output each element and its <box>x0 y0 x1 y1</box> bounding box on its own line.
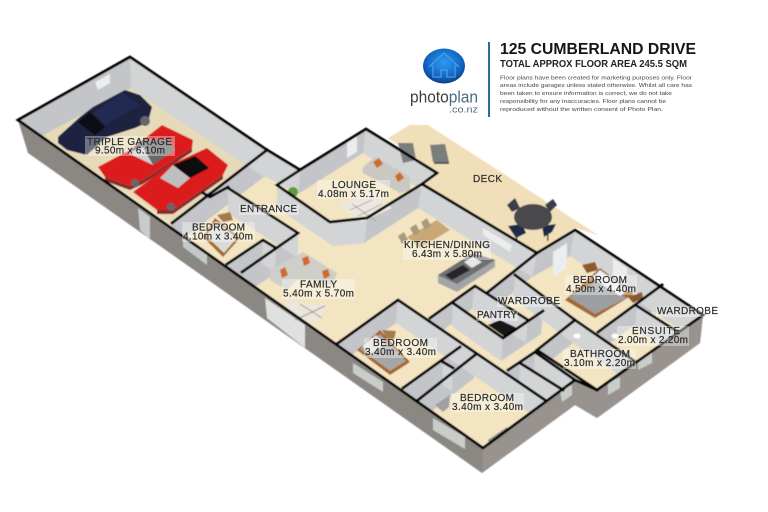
label: bedroom one: 4.10m x 3.40m <box>183 232 253 242</box>
label: entrance: ENTRANCE <box>240 204 297 215</box>
label: lounge: 4.08m x 5.17m <box>318 189 389 200</box>
label: kitchen dining: KITCHEN/DINING <box>404 240 490 251</box>
disclaimer text <box>500 76 692 113</box>
label: lounge: LOUNGE <box>332 180 376 191</box>
disclaimer text: responsibility for any inaccuracies. Floor plans cannot be <box>500 99 666 105</box>
label: corner bedroom: BEDROOM <box>460 393 514 404</box>
label: bedroom one: BEDROOM <box>192 222 245 234</box>
label: wardrobe centre: WARDROBE <box>498 296 560 307</box>
label: wardrobe right: WARDROBE <box>657 306 718 317</box>
logo wordmark: .co.nz <box>449 104 478 116</box>
label: lounge <box>317 180 390 200</box>
furniture: dining table <box>398 218 450 248</box>
disclaimer text: Floor plans have been created for marketing purposes only. Floor <box>500 76 692 82</box>
disclaimer text: reproduced without the written consent of Photo Plan. <box>500 107 664 113</box>
wall openings <box>95 74 627 285</box>
furniture: kitchen island <box>438 253 495 292</box>
furniture: bedroom one bed <box>203 212 240 257</box>
garage floor <box>18 57 267 223</box>
disclaimer text: areas include garages unless stated otherwise. Whilst all care has <box>500 83 692 89</box>
label: kitchen dining: 6.43m x 5.80m <box>412 249 482 260</box>
label: ensuite: ENSUITE <box>632 326 680 337</box>
label: bathroom: BATHROOM <box>570 349 630 360</box>
label: bedroom one <box>182 222 255 242</box>
title: 125 CUMBERLAND DRIVE <box>500 41 696 58</box>
label: main bedroom <box>565 275 637 295</box>
label: family: FAMILY <box>300 280 337 290</box>
logo wordmark: photoplan <box>410 88 478 106</box>
deck floor <box>388 125 598 253</box>
plant <box>288 187 298 197</box>
disclaimer text: been taken to ensure information is correct, we do not take <box>500 91 672 97</box>
room labels <box>85 136 719 413</box>
floor plan <box>18 57 703 473</box>
label: ensuite <box>617 326 689 346</box>
label: middle bedroom <box>364 338 437 358</box>
logo wordmark <box>410 88 478 116</box>
label: triple garage <box>85 136 175 156</box>
label: pantry: PANTRY <box>477 310 517 321</box>
label: main bedroom: 4.50m x 4.40m <box>566 284 636 295</box>
label: deck: DECK <box>473 174 502 185</box>
label: middle bedroom: BEDROOM <box>373 338 428 349</box>
label: main bedroom: BEDROOM <box>573 275 627 286</box>
label: bathroom: 3.10m x 2.20m <box>564 358 635 369</box>
interior floors <box>18 57 703 448</box>
icon: house in blue globe <box>423 48 465 84</box>
furniture: navy SUV <box>58 90 152 155</box>
divider line <box>488 42 490 117</box>
furniture: corner bedroom bed and cabinet <box>435 395 510 446</box>
logo: photoplan <box>410 48 478 116</box>
interior wall faces <box>18 57 703 423</box>
label: corner bedroom <box>451 393 524 413</box>
furniture: deck loungers and dining set <box>398 143 557 241</box>
label: bathroom <box>563 349 636 369</box>
furniture: main bedroom bed <box>565 262 643 318</box>
exterior walls <box>18 120 703 473</box>
furniture: lower bedroom bed <box>357 330 410 375</box>
furniture: lounge sofa and rug <box>338 157 410 222</box>
fixtures: bathroom and ensuite basins <box>574 334 618 338</box>
furniture: red car two <box>133 148 228 214</box>
label: family <box>282 279 355 300</box>
label: kitchen dining <box>403 240 491 260</box>
furniture: pantry counter <box>488 320 517 337</box>
furniture: red car one <box>98 125 193 190</box>
black wall tops <box>18 57 703 448</box>
label: corner bedroom: 3.40m x 3.40m <box>452 402 523 413</box>
label: triple garage: 9.50m x 6.10m <box>95 146 165 156</box>
label: family: 5.40m x 5.70m <box>283 288 354 300</box>
subtitle: floor area: TOTAL APPROX FLOOR AREA 245.5 SQM <box>500 58 687 70</box>
furniture: family sofa and rug <box>270 252 337 325</box>
label: ensuite: 2.00m x 2.20m <box>618 335 688 346</box>
label: middle bedroom: 3.40m x 3.40m <box>365 347 436 358</box>
label: triple garage: TRIPLE GARAGE <box>87 137 172 148</box>
